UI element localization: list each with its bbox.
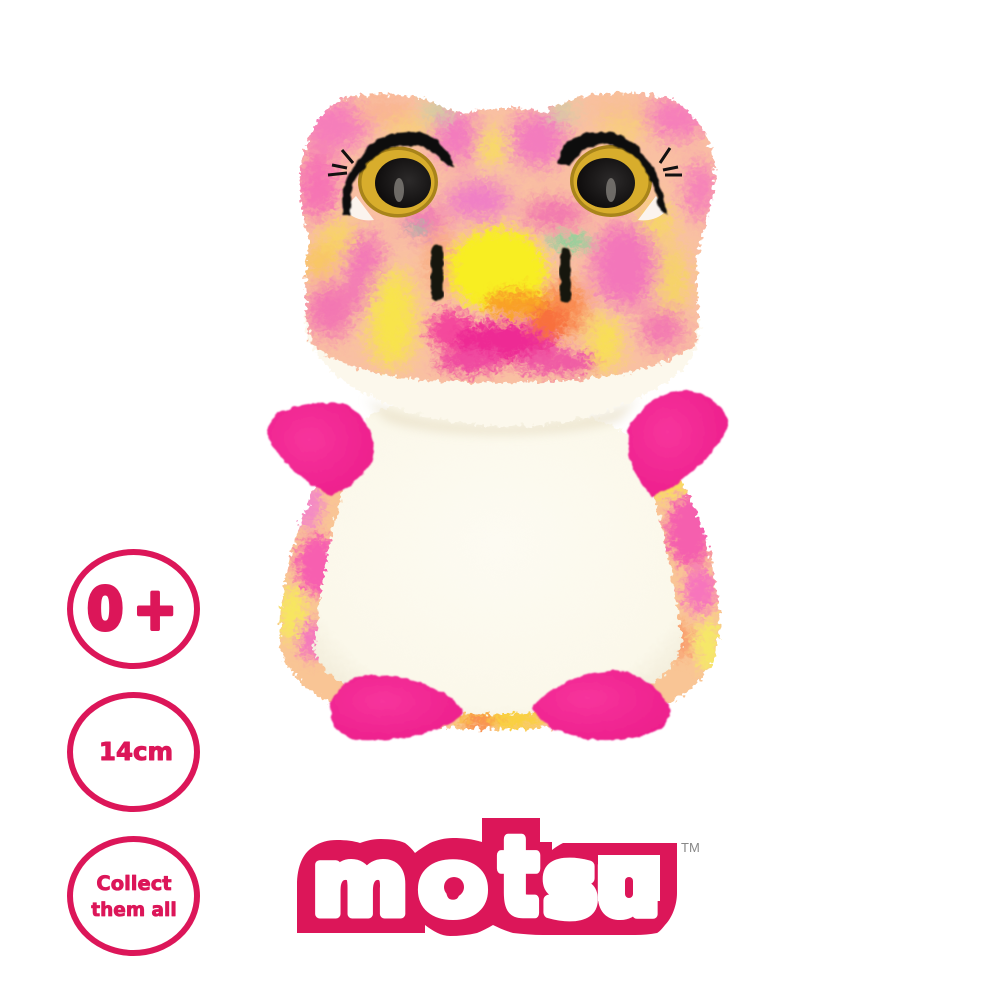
body back fur [277,478,722,732]
motsu logo [297,816,700,939]
right nostril [560,247,571,303]
nose patch [448,228,548,312]
forehead colours [432,112,484,164]
muzzle colours [446,180,510,220]
right eye [558,132,682,220]
trademark: TM [681,840,700,855]
left nostril [431,244,443,301]
badge: size 14cm [70,695,197,809]
age text: 0+ [87,576,187,644]
badge: collect them all [70,839,197,953]
collect text: Collect [96,872,172,895]
logo u block [598,855,660,901]
logo backing shape [297,818,677,936]
badge: age 0+ [70,552,197,666]
left foot [330,675,463,740]
size text: 14cm [99,737,173,766]
left eye [328,132,453,220]
right foot [532,671,670,740]
ear colours [299,99,371,151]
logo letter m: m [312,832,408,936]
logo u slot [625,877,633,898]
logo dot in o [444,877,464,897]
logo letter t: t [500,816,538,939]
collar shadow [365,396,640,435]
right arm [628,390,728,496]
plush toy illustration [260,75,740,750]
them all text: them all [91,900,177,921]
white chin collar [305,312,700,426]
left arm [267,402,373,495]
head fur [298,90,718,385]
belly [314,404,682,714]
logo letter s: s [544,830,596,935]
logo letter o: o [419,832,487,936]
logo letter u: u [595,832,661,936]
